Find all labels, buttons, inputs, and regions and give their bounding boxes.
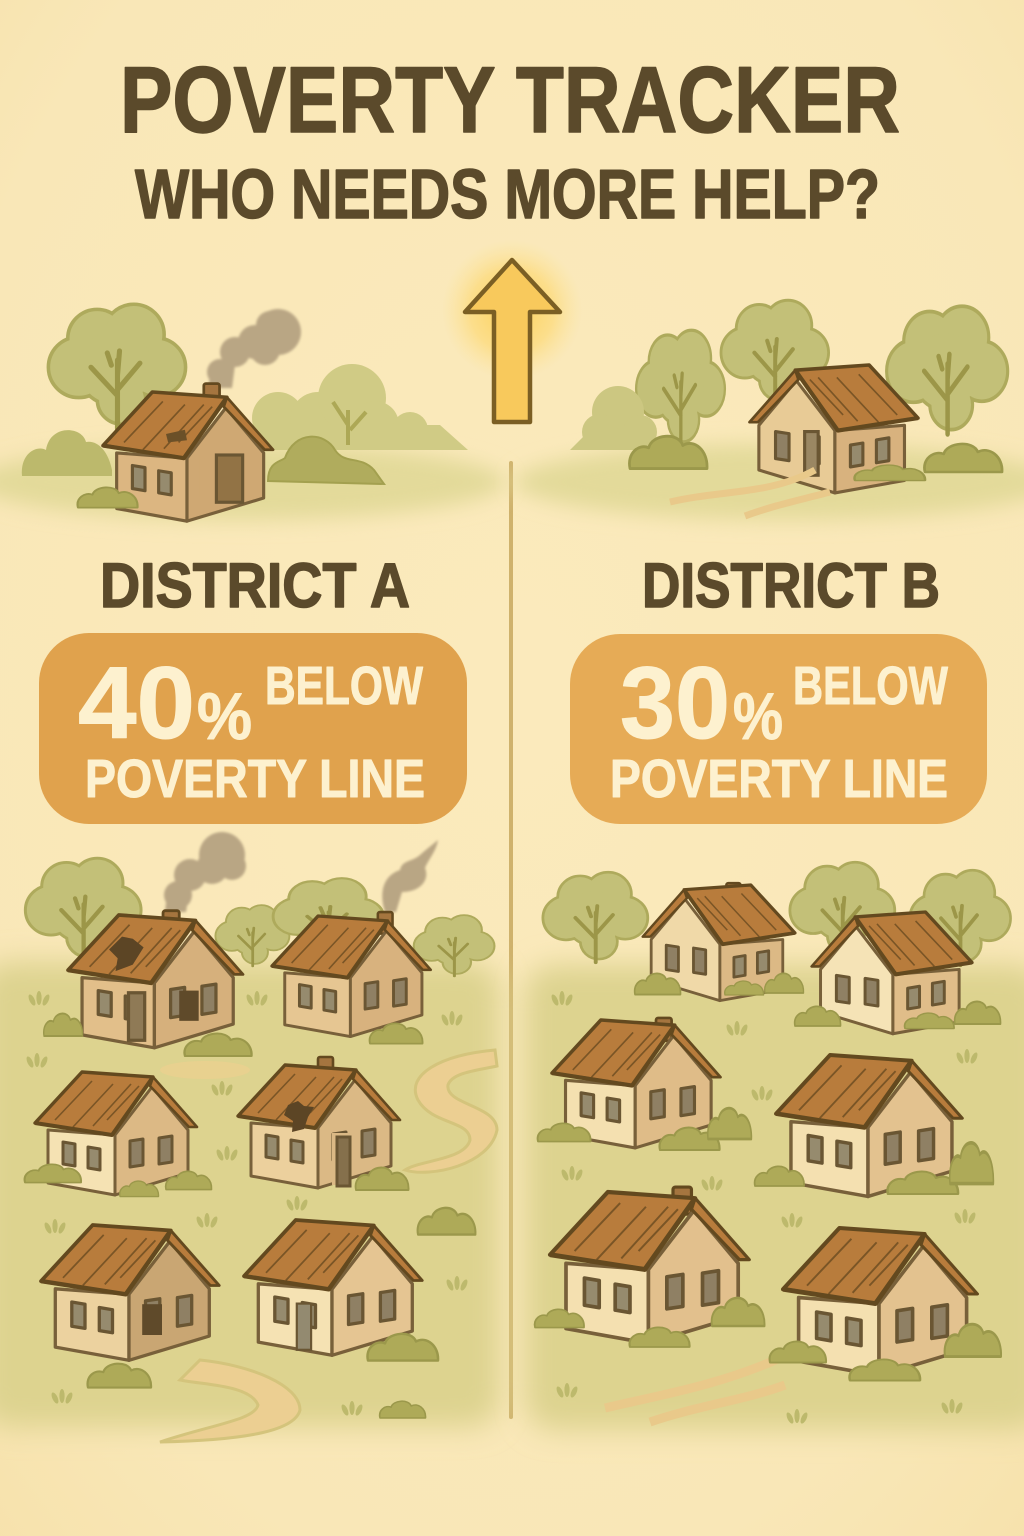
heading: District A: DISTRICT A [100, 551, 410, 621]
smoke: left [164, 832, 246, 912]
house B1 [643, 883, 795, 1001]
bush at house A4 [356, 1168, 409, 1190]
panel: District B statistic [570, 634, 987, 824]
tree: centre left [637, 332, 724, 446]
bush: loose right [418, 1208, 475, 1234]
bushes at house B3 [538, 1108, 751, 1150]
house B4 [776, 1055, 962, 1196]
value: 30: 30 [620, 646, 730, 760]
bush at house A2 [370, 1023, 423, 1044]
value: 40: 40 [78, 646, 195, 760]
label: poverty line: POVERTY LINE [85, 749, 425, 809]
tree group: right [250, 364, 468, 450]
path [670, 470, 830, 516]
house A1: damaged [68, 911, 243, 1048]
label: poverty line: POVERTY LINE [610, 749, 948, 809]
house B5 [550, 1187, 749, 1343]
road: between rows [160, 1061, 250, 1079]
scene: District B village [525, 864, 1024, 1430]
bush: front of house [854, 465, 925, 480]
road [605, 1358, 785, 1422]
tree: right [888, 308, 1006, 434]
house B3 [552, 1018, 720, 1148]
bushes at house B2 [795, 1002, 1001, 1028]
grass tufts [550, 991, 979, 1425]
percent sign: % [733, 679, 783, 753]
bush: right [924, 444, 1002, 472]
centre divider [509, 461, 513, 1419]
smoke: right [382, 840, 438, 912]
bushes at house B6 [770, 1324, 1001, 1380]
bush at house A6 [367, 1334, 438, 1360]
tree: large left [50, 306, 184, 428]
house B2 [812, 912, 972, 1034]
tree: centre [722, 302, 827, 404]
heading: District B: DISTRICT B [642, 551, 940, 621]
house A3: sound [35, 1072, 197, 1195]
background trees [544, 864, 1009, 965]
bushes at house A1 [44, 1014, 252, 1056]
background trees [27, 860, 493, 976]
scene: District B top [515, 302, 1024, 520]
label: below: BELOW [793, 656, 948, 716]
house: tidy [750, 365, 918, 493]
bush: behind house [629, 436, 707, 468]
house B6 [783, 1228, 977, 1376]
house: worn [103, 384, 273, 521]
scene: District A top [0, 306, 505, 521]
bushes at house B1 [635, 973, 804, 995]
bushes at house B4 [755, 1143, 993, 1194]
shrubs: left [570, 386, 660, 450]
road: bottom [160, 1360, 300, 1442]
smoke [207, 309, 301, 388]
subtitle: WHO NEEDS MORE HELP? [135, 155, 880, 233]
bushes at house B5 [535, 1298, 765, 1347]
icon: glowing arrow pointing up [442, 240, 582, 422]
label: below: BELOW [265, 656, 423, 716]
bush: loose bottom [380, 1401, 426, 1418]
house A5: cracked [41, 1225, 219, 1360]
percent sign: % [197, 679, 252, 753]
road [405, 1050, 497, 1172]
house A4: damaged [238, 1057, 400, 1188]
scene: District A village [0, 832, 500, 1442]
bush: front [78, 487, 138, 508]
house A6: sound [244, 1220, 422, 1355]
bushes at house A3 [25, 1164, 212, 1196]
bush: left [22, 430, 112, 476]
bush at house A5 [88, 1364, 151, 1388]
house A2: worn [272, 912, 431, 1037]
grass tufts [25, 991, 469, 1417]
bush: right [268, 437, 384, 484]
panel: District A statistic [39, 633, 467, 824]
